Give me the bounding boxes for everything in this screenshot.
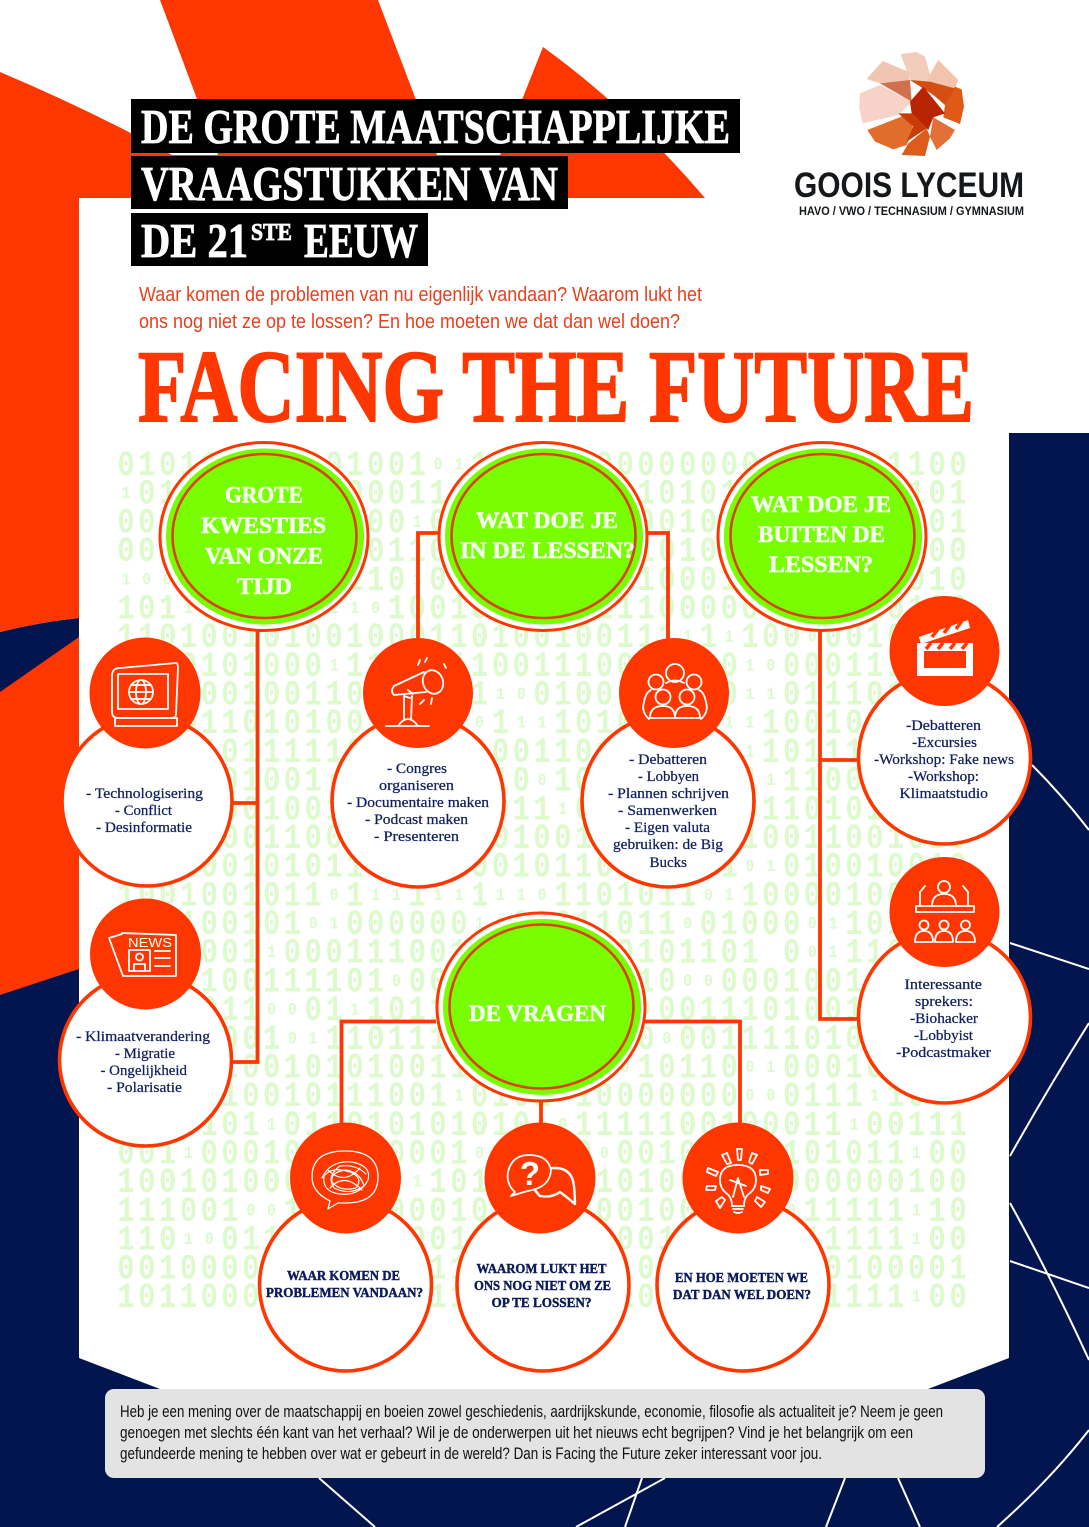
background: binary code pattern: 1 0 010110010110 101010110001000101101011010 bbox=[122, 560, 967, 601]
background: binary code pattern: 001 10001011010001 010000 000101101101011 100 bbox=[117, 1134, 967, 1174]
background: binary code pattern: 010011001010100110001011 010110 0 1000100100 bbox=[117, 1048, 967, 1088]
item: out-of-class activities: -Workshop: bbox=[908, 769, 979, 785]
background: binary code pattern bbox=[117, 445, 975, 1318]
item: in-class activities with group: Bucks bbox=[650, 855, 687, 871]
background: binary code pattern: 10110010101100101001011011 0101 0 1010010010 bbox=[117, 847, 967, 888]
connector lines bbox=[233, 533, 857, 1125]
item: in-class activities with group: - Samenwerken bbox=[618, 803, 718, 819]
background: binary code pattern: 1001001011 01 1 11 1 11 1 1 01101011 0 110000100101 bbox=[117, 876, 967, 916]
logo: Goois Lyceum: GOOIS LYCEUM bbox=[794, 166, 1024, 205]
title: De grote maatschappelijke vraagstukken: VRAAGSTUKKEN VAN bbox=[141, 156, 558, 211]
item: in-class activities with microphone: - Documentaire maken bbox=[347, 795, 490, 811]
background: binary code pattern: 0100100111101 00000101011010 0 0000100100111 bbox=[117, 962, 967, 1002]
icon: film clapperboard bbox=[917, 620, 973, 676]
background: binary code pattern: 1100101111100 01001001101001011 11011101011 bbox=[117, 732, 967, 773]
heading circle: Grote kwesties: TIJD bbox=[237, 574, 292, 600]
icon: speakers panel and audience bbox=[915, 881, 975, 942]
question: waar komen de problemen vandaan: PROBLEMEN VANDAAN? bbox=[266, 1286, 423, 1301]
background: binary code pattern: 1001010001101 0 1101001011010000 0 0000000100 bbox=[117, 1163, 967, 1203]
icon: speech bubbles with question mark bbox=[508, 1155, 575, 1204]
question: hoe moeten we dat doen bbox=[657, 1122, 829, 1371]
item: climate and society topics: - Ongelijkheid bbox=[100, 1063, 188, 1079]
background: binary code pattern: 00101100100 0011011010 11 111010010110101000 bbox=[117, 532, 967, 572]
background: binary code pattern: 101 1001011 1 1 01001011100111000001011010100 bbox=[117, 589, 967, 629]
item: climate and society topics: - Polarisatie bbox=[107, 1080, 182, 1096]
icon: light bulb bbox=[706, 1149, 770, 1213]
background: white panel bbox=[79, 198, 1089, 1389]
item: in-class activities with microphone: - Podcast maken bbox=[365, 812, 469, 828]
background: binary code pattern: 110 1 001100101100101 0110100101001111111 100 bbox=[117, 1220, 967, 1261]
question: waarom lukt het niet: WAAROM LUKT HET bbox=[476, 1262, 607, 1277]
background: binary code pattern: 01001101010010111 01 1 11010110 0 1 11001001101 bbox=[117, 704, 967, 744]
subtitle: ons nog niet ze op te lossen? En hoe moeten we dat dan wel doen? bbox=[139, 311, 680, 333]
icon: newspaper: NEWS bbox=[128, 935, 172, 950]
question: waarom lukt het niet: ONS NOG NIET OM ZE bbox=[474, 1279, 611, 1294]
item: in-class activities with group bbox=[582, 638, 754, 887]
heading circle: Wat doe je in de lessen: IN DE LESSEN? bbox=[460, 538, 635, 564]
item: technology topics bbox=[62, 638, 232, 886]
item: in-class activities with microphone bbox=[332, 638, 504, 887]
question: hoe moeten we dat doen: DAT DAN WEL DOEN? bbox=[673, 1288, 811, 1303]
subtitle bbox=[139, 284, 702, 333]
item: out-of-class activities: -Workshop: Fake news bbox=[874, 752, 1014, 768]
title: De grote maatschappelijke vraagstukken: DE GROTE MAATSCHAPPLIJKE bbox=[141, 99, 730, 154]
icon: newspaper bbox=[109, 933, 176, 976]
item: out-of-class activities: -Debatteren bbox=[906, 718, 982, 734]
background: binary code pattern: 010110010001001 0 1101001000000001010001100 bbox=[117, 445, 967, 486]
icon: microphone bbox=[386, 658, 447, 726]
bottom text box: genoegen met slechts één kant van het verhaal? Wil je de onderwerpen uit het nieuws echt begrijpen? Vind je het belangrijk om een bbox=[120, 1424, 913, 1442]
item: in-class activities with microphone: organiseren bbox=[379, 778, 455, 794]
background: binary code pattern: 1001001 100011100100110100101101 0 0 11101010 bbox=[117, 933, 975, 974]
question: hoe moeten we dat doen: EN HOE MOETEN WE bbox=[675, 1271, 808, 1286]
question: waarom lukt het niet bbox=[457, 1122, 629, 1371]
icon: speech bubbles with question mark: ? bbox=[520, 1155, 540, 1192]
item: in-class activities with microphone: - Presenteren bbox=[374, 829, 460, 845]
icon: speech bubble with scribble bbox=[312, 1151, 378, 1209]
background: orange shapes bbox=[0, 0, 705, 995]
bottom text box: gefundeerde mening te hebben over wat er gebeurt in de wereld? Dan is Facing the Future zeker interessant voor jou. bbox=[120, 1445, 822, 1463]
background: binary code pattern: 100110010011000101011 10101 1 01 001101011010 bbox=[117, 790, 967, 830]
background: binary code pattern: 00110100101100 100101101010010100101100101 bbox=[117, 503, 967, 543]
title: De grote maatschappelijke vraagstukken: EEUW bbox=[304, 213, 418, 268]
background: binary code pattern: 1011010010100011 11010010 11010110100101101 bbox=[122, 474, 967, 515]
item: in-class activities with group: - Plannen schrijven bbox=[608, 786, 730, 802]
heading circle: Wat doe je in de lessen bbox=[439, 442, 647, 630]
item: in-class activities with group: gebruiken: de Big bbox=[613, 837, 723, 853]
background: binary code pattern: 110100101001000110100100111 11 1100 00010010 bbox=[117, 618, 967, 658]
heading circle: Grote kwesties bbox=[160, 442, 368, 630]
item: in-class activities with group: - Eigen valuta bbox=[625, 820, 711, 836]
item: in-class activities with group: - Debatteren bbox=[629, 752, 708, 768]
background: binary code pattern: 111001 0 0101010001010010001001000 011111 110 bbox=[117, 1191, 967, 1232]
item: climate and society topics bbox=[60, 898, 232, 1146]
heading circle: Grote kwesties: GROTE bbox=[225, 482, 303, 508]
question: waar komen de problemen vandaan: WAAR KOMEN DE bbox=[287, 1269, 400, 1284]
background: binary code pattern: 1010011 0 001 1101101101010 0 0001110100101101 bbox=[117, 991, 967, 1031]
background: binary code pattern: 00100001011001011010010110100101100100001 bbox=[117, 1249, 967, 1289]
icon: computer monitor with globe bbox=[112, 663, 178, 726]
background: navy shapes bbox=[0, 433, 1089, 1527]
heading circle: Wat doe je buiten de lessen: BUITEN DE bbox=[758, 522, 885, 548]
title: De grote maatschappelijke vraagstukken bbox=[131, 99, 740, 268]
background: binary code pattern: 1001110010111001 10101 010000000 0 00111 11000 bbox=[117, 1077, 967, 1117]
background: binary code pattern: 0010101001 0 101011010 010010110 01 1110001110 bbox=[117, 761, 967, 802]
item: climate and society topics: - Klimaatverandering bbox=[76, 1029, 210, 1045]
item: out-of-class activities: -Excursies bbox=[912, 735, 977, 751]
logo: Goois Lyceum bbox=[794, 52, 1024, 218]
heading circle: Wat doe je buiten de lessen: LESSEN? bbox=[769, 552, 873, 578]
question: waarom lukt het niet: OP TE LOSSEN? bbox=[492, 1296, 592, 1311]
title: De grote maatschappelijke vraagstukken: STE bbox=[251, 220, 292, 246]
logo mark bbox=[859, 52, 964, 156]
heading circle: De vragen bbox=[437, 913, 645, 1101]
question: waar komen de problemen vandaan bbox=[260, 1122, 432, 1371]
background: binary code pattern: 100100100110010011 1 00100100110 1 1011101110 bbox=[117, 675, 967, 715]
heading circle: Grote kwesties: VAN ONZE bbox=[205, 544, 323, 570]
heading circle: Wat doe je buiten de lessen: WAT DOE JE bbox=[751, 492, 891, 518]
icon: group of people bbox=[643, 664, 707, 719]
heading circle: Wat doe je in de lessen: WAT DOE JE bbox=[476, 508, 618, 534]
item: guest speakers bbox=[858, 857, 1030, 1103]
background: binary code pattern: 0100101000 11111011001110000110 1 0000111011 bbox=[117, 646, 967, 687]
heading circle: Grote kwesties: KWESTIES bbox=[201, 513, 326, 539]
item: climate and society topics: - Migratie bbox=[115, 1046, 175, 1062]
item: guest speakers: -Lobbyist bbox=[914, 1028, 973, 1044]
item: out-of-class activities bbox=[858, 596, 1030, 844]
background: binary code pattern: 010100101 0 1000000 1 000011011 001000 0 1101010 bbox=[117, 904, 967, 945]
item: guest speakers: sprekers: bbox=[915, 994, 973, 1010]
item: out-of-class activities: Klimaatstudio bbox=[900, 786, 988, 802]
bottom text box bbox=[105, 1389, 985, 1478]
background: binary code pattern: 00101001100111000101001010 01 1 110011001010 bbox=[117, 818, 967, 859]
background: binary code pattern: 1011000010100 1011010010110101010111111 100 bbox=[117, 1277, 967, 1318]
background: white network lines bbox=[319, 765, 1089, 1527]
item: guest speakers: -Podcastmaker bbox=[896, 1045, 991, 1061]
item: technology topics: - Conflict bbox=[115, 803, 172, 819]
heading circle: Wat doe je buiten de lessen bbox=[718, 442, 926, 630]
logo: Goois Lyceum: HAVO / VWO / TECHNASIUM / GYMNASIUM bbox=[799, 204, 1024, 218]
item: guest speakers: -Biohacker bbox=[910, 1011, 978, 1027]
subtitle: Waar komen de problemen van nu eigenlijk vandaan? Waarom lukt het bbox=[139, 284, 702, 306]
background: binary code pattern: 0110101 1011010101010 0 01111100100011 100111 bbox=[117, 1105, 967, 1146]
title: De grote maatschappelijke vraagstukken: DE 21 bbox=[141, 213, 248, 268]
item: technology topics: - Desinformatie bbox=[96, 820, 192, 836]
item: guest speakers: Interessante bbox=[904, 977, 982, 993]
item: in-class activities with microphone: - Congres bbox=[387, 761, 447, 777]
item: in-class activities with group: - Lobbyen bbox=[638, 769, 700, 785]
background: binary code pattern: 00101001 0 11101110100100 0 10 00011110100110 1 bbox=[117, 1019, 975, 1060]
item: technology topics: - Technologisering bbox=[86, 786, 203, 802]
heading circle: De vragen: DE VRAGEN bbox=[469, 1001, 606, 1027]
